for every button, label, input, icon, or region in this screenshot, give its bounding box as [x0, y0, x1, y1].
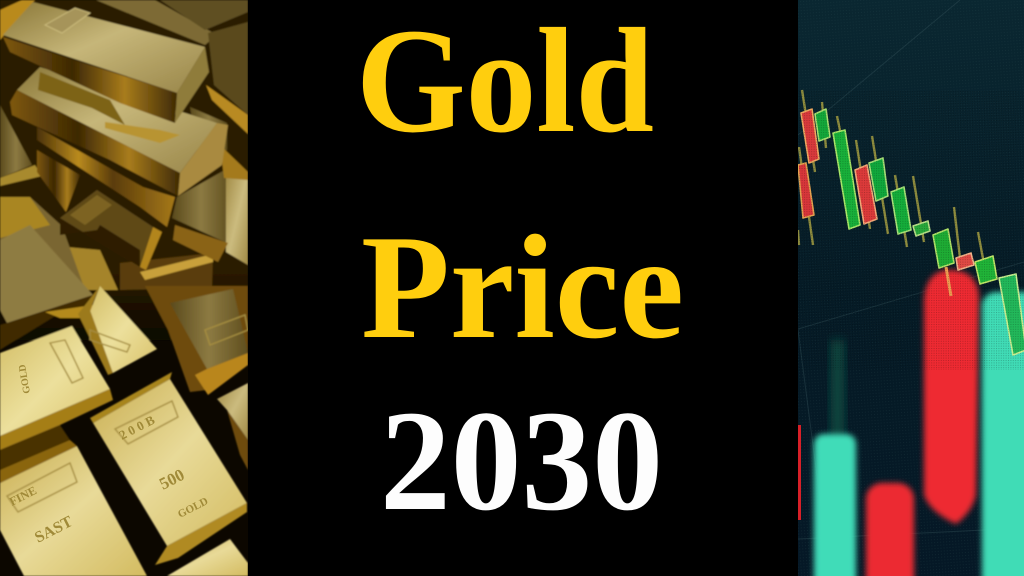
bar engravings: 500	[156, 465, 188, 494]
lower right bars	[78, 286, 248, 470]
bar engravings: FINE	[7, 483, 39, 509]
bar engravings: GOLD	[176, 495, 210, 521]
top gold bar	[3, 2, 209, 123]
bar engravings: SAST	[32, 513, 76, 547]
panel: title	[356, 0, 684, 541]
bar engravings	[7, 363, 210, 547]
bar engravings: 2 0 0 B	[117, 412, 157, 443]
lower left bar	[0, 225, 96, 350]
bright bars	[0, 326, 248, 576]
heading: Gold: Gold	[356, 0, 654, 164]
panel: candlestick chart photo	[798, 0, 1024, 576]
bar stamps	[7, 315, 248, 512]
blurred foreground candles	[798, 270, 1024, 576]
bar engravings: GOLD	[17, 363, 33, 394]
upper background bars	[0, 0, 248, 340]
heading: Price: Price	[361, 205, 684, 370]
candlesticks	[798, 90, 1024, 370]
panel: gold bars photo	[0, 0, 248, 576]
heading: 2030: 2030	[380, 382, 663, 541]
middle small bar	[60, 190, 162, 270]
second gold bar	[10, 67, 228, 196]
